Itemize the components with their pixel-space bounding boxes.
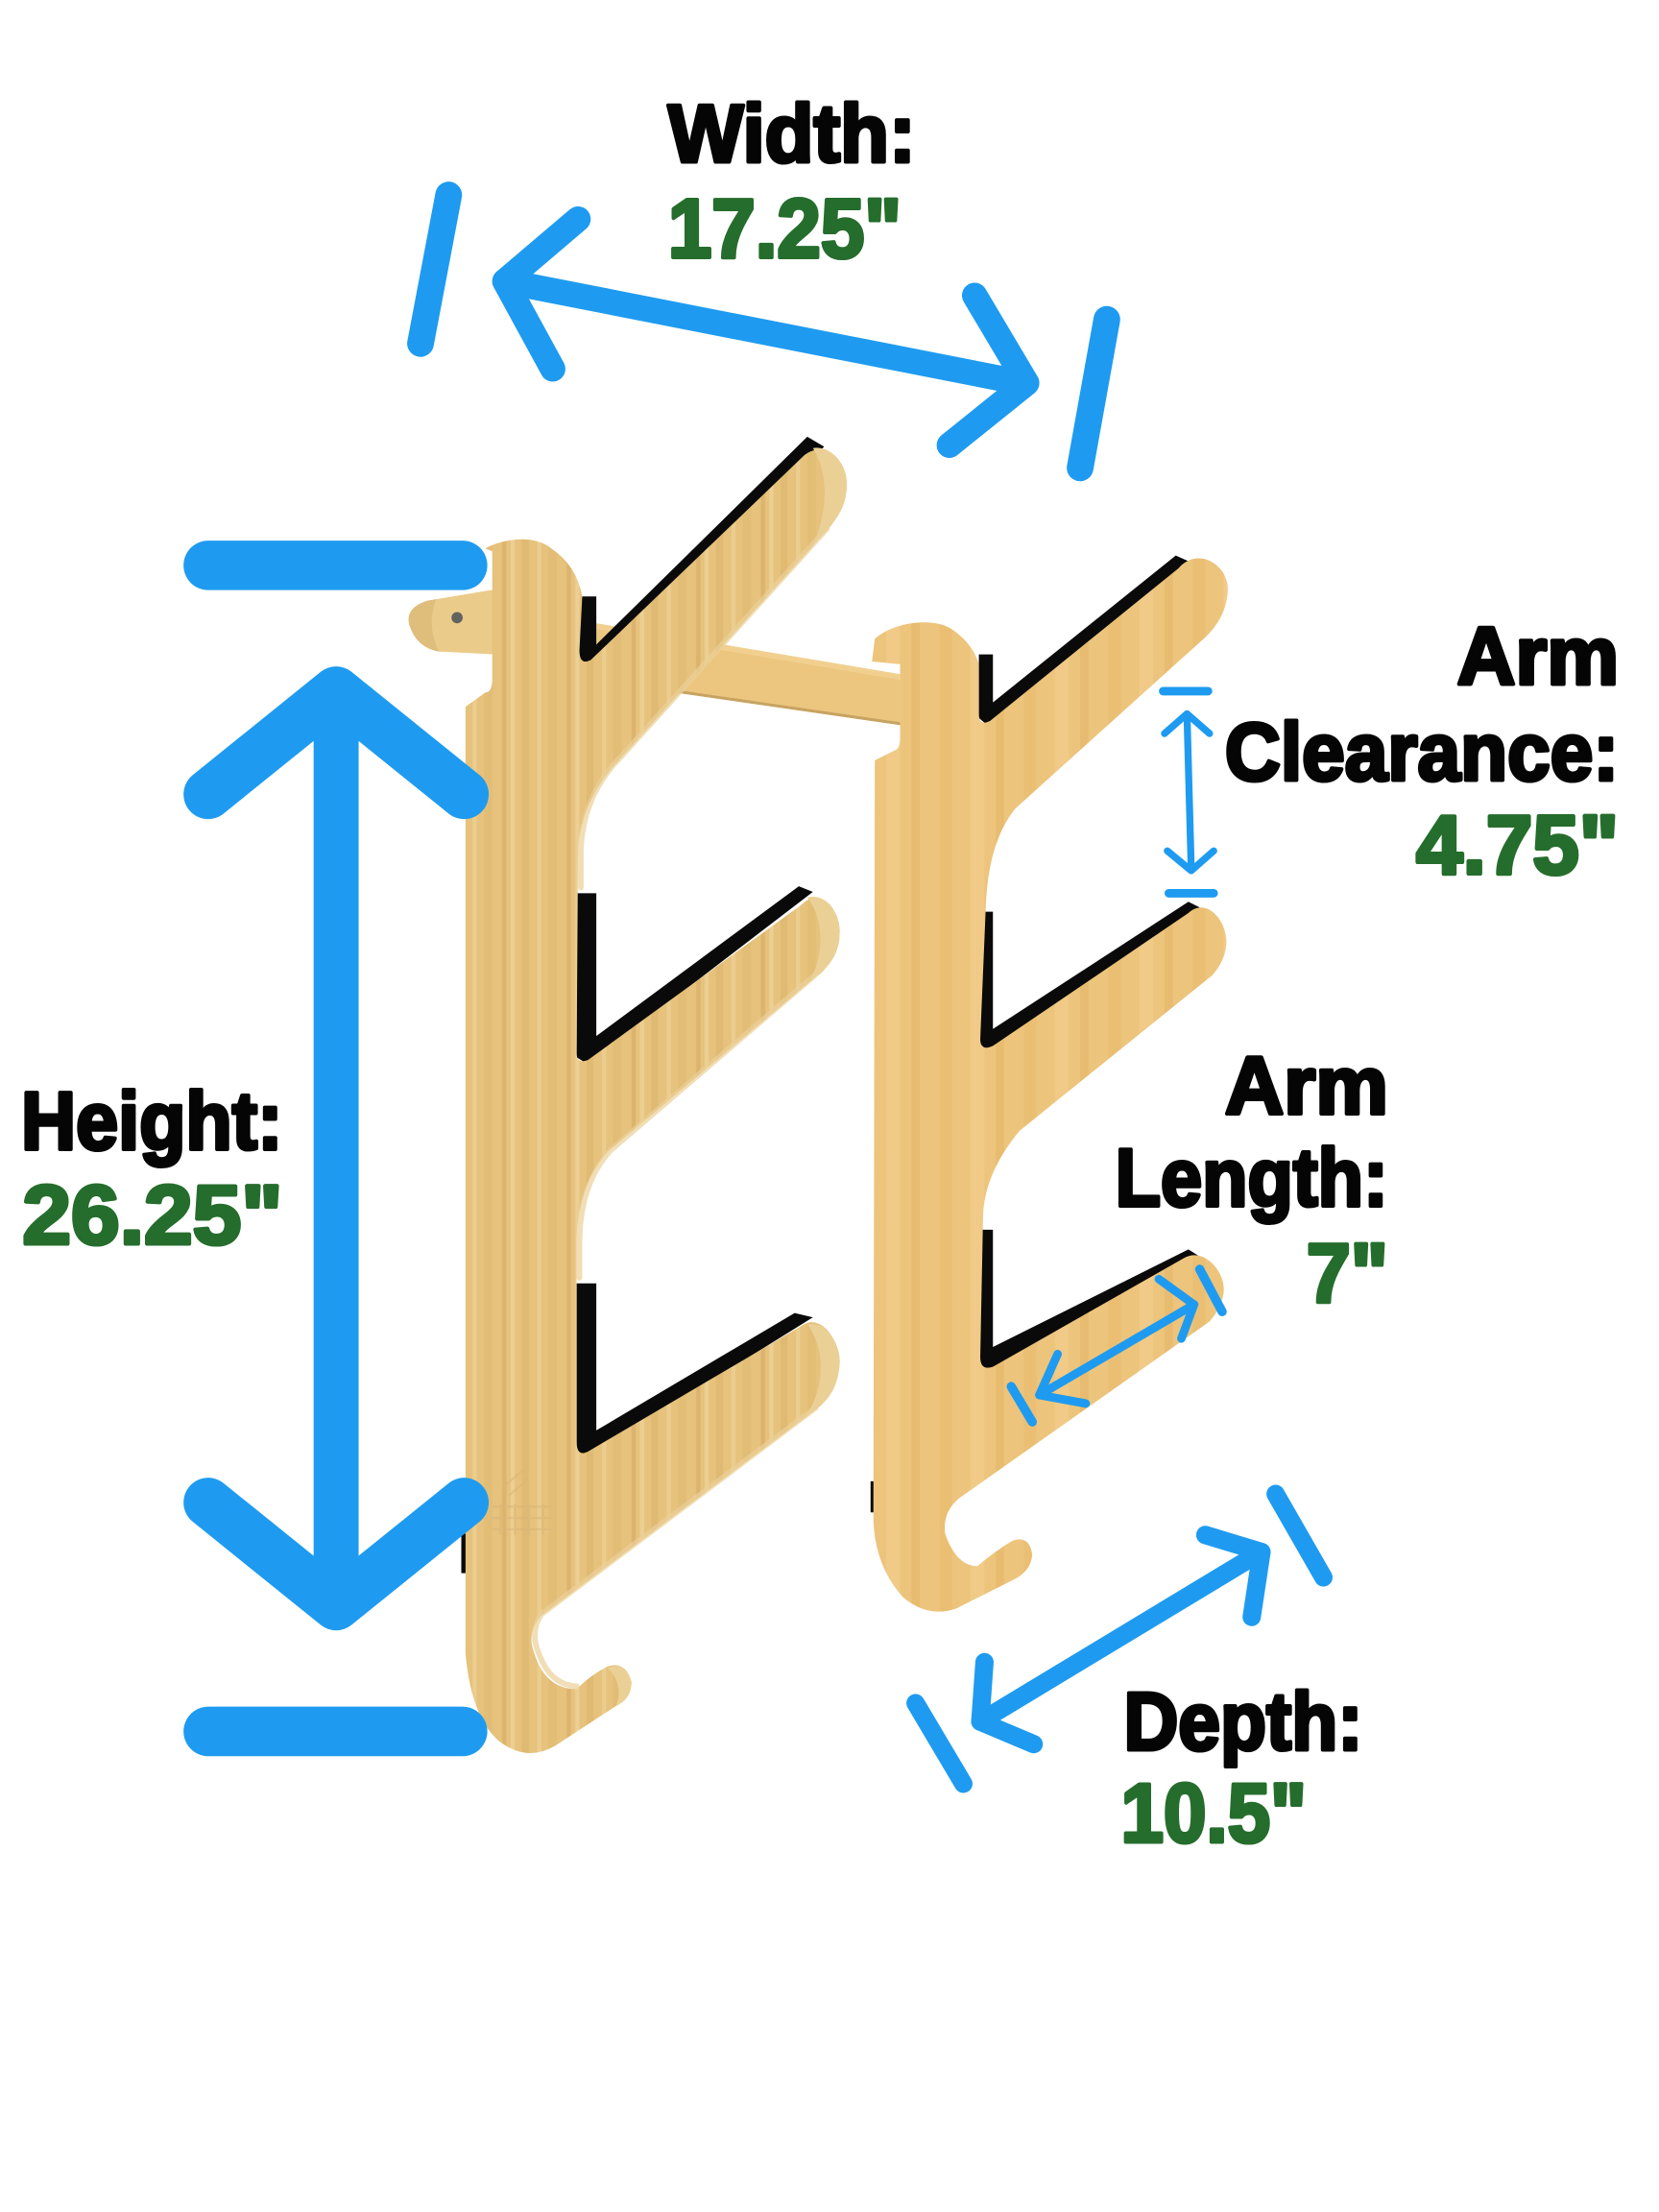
- back connecting bar: [596, 623, 901, 725]
- label: arm length: [1116, 1041, 1388, 1320]
- label: height: 26.25": [22, 1169, 282, 1262]
- label: width: 17.25": [668, 183, 902, 276]
- label: width: [668, 88, 916, 276]
- arm length arrow: [1011, 1269, 1222, 1422]
- label: arm length: 7": [1307, 1228, 1388, 1320]
- depth dimension arrow: [916, 1494, 1323, 1784]
- label: arm length: Arm: [1225, 1041, 1388, 1132]
- left rack stub and screw: [409, 589, 495, 655]
- left rack bevelled edges and arm tips: [535, 447, 847, 1706]
- label: depth: [1121, 1676, 1362, 1860]
- label: height: [21, 1076, 282, 1262]
- height dimension arrow: [208, 565, 464, 1731]
- right rack rubber pads: [871, 556, 1200, 1512]
- label: arm clearance: 4.75": [1416, 800, 1619, 892]
- left bamboo rack: [466, 449, 847, 1753]
- left rack rubber pads: [461, 437, 824, 1574]
- label: arm length: Length:: [1116, 1133, 1388, 1224]
- label: arm clearance: Clearance:: [1225, 707, 1619, 799]
- label: height: Height:: [21, 1076, 282, 1167]
- label: arm clearance: Arm: [1457, 611, 1619, 703]
- label: depth: Depth:: [1123, 1676, 1362, 1768]
- right bamboo rack: [872, 559, 1228, 1612]
- label: depth: 10.5": [1121, 1767, 1307, 1860]
- label: arm clearance: [1225, 611, 1619, 892]
- label: width: Width:: [668, 88, 916, 180]
- engraved logo: [493, 1470, 551, 1535]
- width dimension arrow: [421, 195, 1107, 468]
- arm clearance arrow: [1163, 691, 1214, 893]
